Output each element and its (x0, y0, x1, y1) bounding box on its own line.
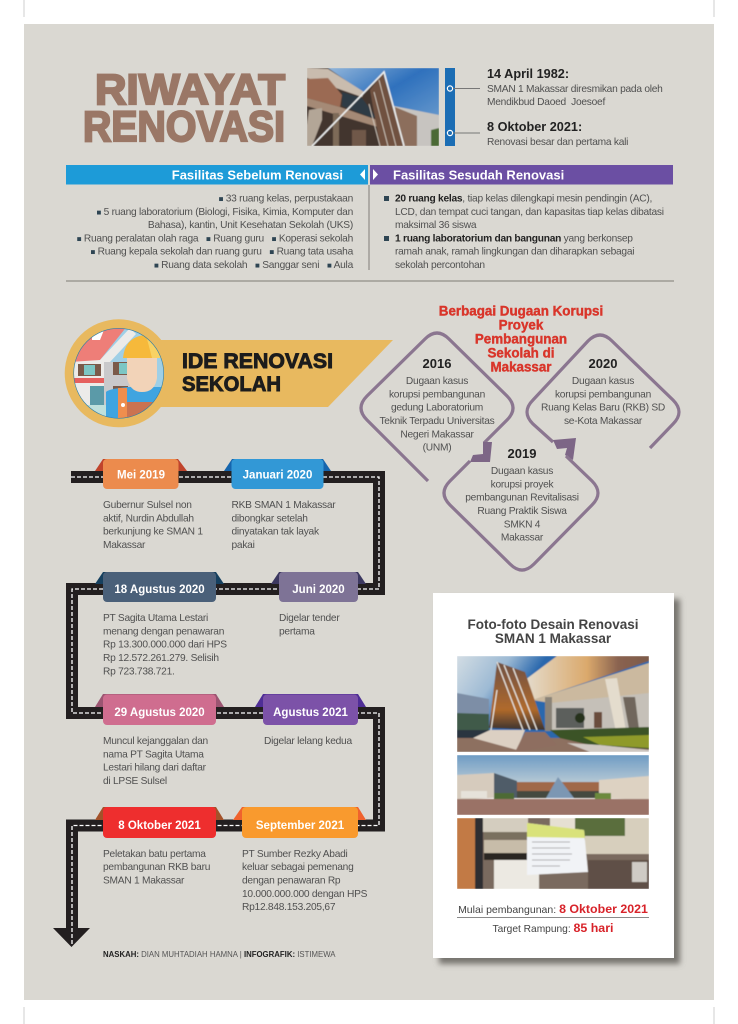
diamond: 2019: Makassar (501, 532, 544, 544)
diamond: 2019 (444, 446, 598, 570)
photo: building wide view (457, 755, 649, 815)
milestone: 18 Agustus 2020: menang dengan penawaran (103, 626, 224, 638)
heading: corruption cases (439, 304, 603, 374)
diamond: 2020 (527, 335, 679, 460)
banner heading (182, 349, 333, 396)
milestone: Januari 2020 (224, 459, 336, 551)
milestone: 18 Agustus 2020: Rp 13.300.000.000 dari HPS (103, 640, 227, 650)
milestone: 8 Oktober 2021 (95, 807, 224, 886)
diamond: 2016: Negeri Makassar (400, 430, 474, 440)
diamond: 2016: 2016 (423, 356, 451, 371)
panel: renovation photo card (433, 593, 680, 964)
milestone: Januari 2020: RKB SMAN 1 Makassar (232, 500, 336, 511)
banner heading: IDE RENOVASI (182, 349, 333, 373)
history dates: Mendikbud Daoed Joesoef (487, 97, 605, 108)
heading: corruption cases: Proyek (499, 318, 544, 332)
diamond: 2020: se-Kota Makassar (564, 416, 643, 427)
history dates (487, 67, 663, 148)
banner heading: SEKOLAH (182, 372, 281, 396)
milestone: Mei 2019: Mei 2019 (117, 470, 165, 482)
milestone: September 2021: Rp12.848.153.205,67 (242, 902, 336, 913)
diamond: 2019: Dugaan kasus (491, 466, 553, 477)
diamond: 2019: SMKN 4 (504, 520, 541, 530)
history dates: Renovasi besar dan pertama kali (487, 137, 628, 148)
diamond: 2020: korupsi pembangunan (555, 390, 651, 400)
diamond: 2016: (UNM) (423, 442, 451, 454)
credit line: NASKAH: DIAN MUHTADIAH HAMNA | INFOGRAFIK: ISTIMEWA (103, 950, 336, 959)
milestone: Januari 2020: dibongkar setelah (232, 514, 308, 524)
panel: facilities after renovation: 20 ruang kelas, tiap kelas dilengkapi mesin pendingin (AC), (395, 194, 652, 204)
milestone: Mei 2019: berkunjung ke SMAN 1 (103, 526, 203, 538)
history dates: 8 Oktober 2021: (487, 120, 582, 134)
milestone: September 2021: keluar sebagai pemenang (242, 862, 354, 873)
diamond: 2020: Dugaan kasus (572, 376, 634, 387)
milestone: September 2021: September 2021 (256, 820, 345, 832)
diamond: 2016: korupsi pembangunan (389, 390, 485, 400)
milestone: Mei 2019: Makassar (103, 540, 146, 551)
milestone: 18 Agustus 2020: Rp 12.572.261.279. Selisih (103, 653, 219, 664)
panel: facilities after renovation (370, 165, 673, 271)
diamond: 2016 (361, 333, 513, 481)
diamond: 2019: 2019 (508, 446, 536, 461)
milestone: Juni 2020: pertama (279, 626, 315, 638)
milestone: 29 Agustus 2020 (95, 694, 224, 787)
milestone: Januari 2020: pakai (232, 540, 255, 551)
milestone: 29 Agustus 2020: nama PT Sagita Utama (103, 750, 204, 760)
heading: corruption cases: Makassar (490, 360, 552, 374)
milestone: 8 Oktober 2021: pembangunan RKB baru (103, 862, 210, 873)
title: Riwayat Renovasi: RIWAYAT (95, 66, 285, 114)
milestone: 8 Oktober 2021: Peletakan batu pertama (103, 849, 206, 860)
photo: building front perspective (457, 656, 649, 752)
diamond: 2019: Ruang Praktik Siswa (477, 506, 567, 517)
card heading: SMAN 1 Makassar (495, 631, 612, 646)
completion target: Target Rampung: 85 hari (493, 921, 613, 935)
title: Riwayat Renovasi: RENOVASI (83, 103, 285, 151)
panel: facilities before renovation: ■ 33 ruang kelas, perpustakaan (219, 194, 353, 204)
milestone: Mei 2019: aktif, Nurdin Abdullah (103, 514, 194, 524)
timeline road with arrow (53, 477, 379, 947)
milestone: Januari 2020: Januari 2020 (243, 470, 312, 482)
milestone: September 2021: dengan penawaran Rp (242, 876, 341, 886)
panel: facilities before renovation: Fasilitas Sebelum Renovasi (172, 168, 343, 182)
milestone: Agustus 2021: Agustus 2021 (273, 707, 348, 719)
panel: facilities after renovation: LCD, dan tempat cuci tangan, dan kapasitas tiap kelas dibatasi (395, 207, 664, 218)
panel: facilities after renovation: sekolah percontohan (395, 260, 485, 271)
milestone: 18 Agustus 2020: 18 Agustus 2020 (114, 584, 205, 596)
milestone: 29 Agustus 2020: 29 Agustus 2020 (114, 707, 205, 719)
title: Riwayat Renovasi (83, 66, 285, 151)
panel: facilities after renovation: maksimal 36 siswa (395, 220, 477, 231)
panel: facilities after renovation: ramah anak, ramah lingkungan dan diharapkan sebagai (395, 246, 634, 258)
milestone: Agustus 2021 (255, 694, 366, 747)
diamond: 2016: Teknik Terpadu Universitas (379, 416, 495, 427)
milestone: Juni 2020: Digelar tender (279, 613, 340, 624)
history dates: 14 April 1982: (487, 67, 569, 81)
milestone: September 2021: PT Sumber Rezky Abadi (242, 849, 348, 860)
construction start date: Mulai pembangunan: 8 Oktober 2021 (458, 902, 648, 916)
milestone: Juni 2020: Juni 2020 (292, 584, 345, 596)
milestone: 8 Oktober 2021: 8 Oktober 2021 (118, 820, 201, 832)
milestone: September 2021: 10.000.000.000 dengan HPS (242, 889, 368, 900)
milestone: 8 Oktober 2021: SMAN 1 Makassar (103, 876, 185, 886)
milestone: Agustus 2021: Digelar lelang kedua (264, 736, 352, 747)
photo: construction site with sign board (457, 818, 649, 889)
diamond: 2016: gedung Laboratorium (391, 402, 483, 414)
banner: Ide Renovasi Sekolah (65, 319, 393, 427)
heading: corruption cases: Sekolah di (488, 346, 554, 360)
milestone: Januari 2020: dinyatakan tak layak (232, 526, 320, 538)
card heading: Foto-foto Desain Renovasi (467, 617, 639, 632)
panel: facilities before renovation (66, 165, 368, 271)
milestone: September 2021 (233, 807, 368, 913)
heading: corruption cases: Pembangunan (475, 332, 567, 346)
milestone: 18 Agustus 2020: PT Sagita Utama Lestari (103, 613, 208, 624)
panel: facilities before renovation: ■ Ruang peralatan olah raga ■ Ruang guru ■ Koperasi sekolah (77, 234, 353, 244)
header photo: school building (307, 68, 439, 146)
heading: corruption cases: Berbagai Dugaan Korupsi (439, 304, 603, 318)
panel: facilities before renovation: ■ Ruang data sekolah ■ Sanggar seni ■ Aula (154, 260, 354, 271)
milestone: 29 Agustus 2020: Lestari hilang dari daftar (103, 762, 207, 774)
diamond: 2020: Ruang Kelas Baru (RKB) SD (541, 402, 665, 414)
diamond: 2019: pembangunan Revitalisasi (465, 492, 579, 504)
panel: facilities after renovation: Fasilitas Sesudah Renovasi (393, 168, 564, 182)
panel: facilities after renovation: 1 ruang laboratorium dan bangunan yang berkonsep (395, 234, 633, 244)
diamond: 2016: Dugaan kasus (406, 376, 468, 387)
milestone: Juni 2020 (271, 572, 366, 638)
icon: house and construction worker (74, 328, 164, 418)
panel: facilities before renovation: ■ 5 ruang laboratorium (Biologi, Fisika, Kimia, Komputer dan (96, 207, 353, 218)
card heading (467, 617, 639, 646)
history dates: SMAN 1 Makassar diresmikan pada oleh (487, 84, 663, 95)
timeline bar with two markers (445, 68, 480, 146)
panel: facilities before renovation: ■ Ruang kepala sekolah dan ruang guru ■ Ruang tata usaha (90, 246, 354, 258)
milestone: Mei 2019 (95, 459, 203, 551)
milestone: 18 Agustus 2020: Rp 723.738.721. (103, 666, 175, 678)
milestone: 29 Agustus 2020: di LPSE Sulsel (103, 776, 167, 787)
diamond: 2019: korupsi proyek (491, 480, 555, 490)
milestone: Mei 2019: Gubernur Sulsel non (103, 500, 192, 511)
diamond: 2020: 2020 (589, 356, 617, 371)
milestone: 29 Agustus 2020: Muncul kejanggalan dan (103, 736, 208, 747)
panel: facilities before renovation: Bahasa), kantin, Unit Kesehatan Sekolah (UKS) (148, 220, 353, 231)
milestone: 18 Agustus 2020 (95, 572, 227, 678)
